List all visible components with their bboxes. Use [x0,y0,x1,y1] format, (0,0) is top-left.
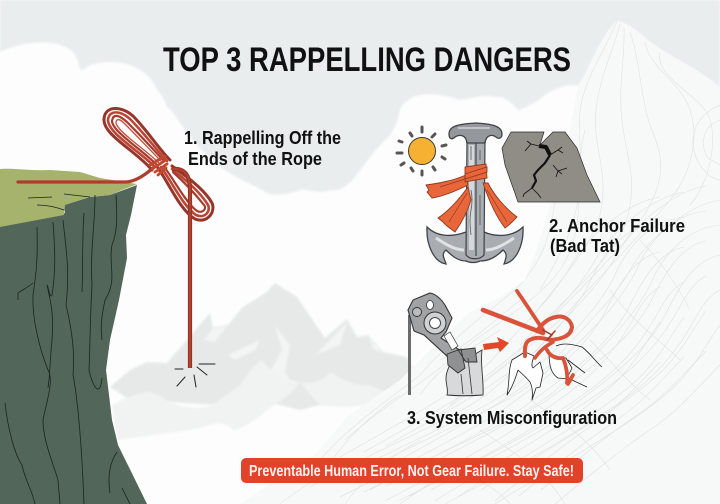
panel: cliff [0,169,147,504]
label 1: 1. Rappelling Off the [184,128,341,148]
label 2: (Bad Tat) [550,236,620,256]
icon: belay device [408,293,483,396]
upper coil loop [104,108,170,170]
scarf tails [426,175,517,232]
mountain snow highlights [204,322,383,390]
rock crack [523,141,567,198]
fog bank [112,360,390,440]
knot rope [483,291,573,384]
distant mountains [110,283,415,410]
anchor top bar [449,123,502,143]
hanging rope end [172,169,190,368]
banner: Preventable Human Error, Not Gear Failure. Stay Safe! [249,463,574,480]
icon: sun [397,127,446,175]
panel: rope coil [18,108,215,387]
title: TOP 3 RAPPELLING DANGERS [163,41,571,79]
device rope [408,315,411,395]
lower coil loop [158,166,213,220]
label 2 [549,216,685,256]
anchor flukes [427,227,523,264]
glove and hand [446,350,483,396]
impact marks [175,364,215,387]
device plate [408,293,461,362]
icon: hands tying knot [483,291,602,400]
icon: cracked rock [502,132,600,202]
rock cracks [5,194,130,504]
cliff grass top [0,169,137,227]
icon: anchor [426,123,523,264]
banner [241,458,583,483]
anchor shaft [466,140,485,259]
sky and clouds [0,0,720,195]
label 3: 3. System Misconfiguration [407,408,617,428]
arrow [483,337,509,352]
scarf knot [465,164,487,182]
label 1 [184,128,341,169]
cliff rock face [0,185,147,504]
hands [507,344,602,400]
rope on ledge [18,168,153,182]
glove cuff [447,348,477,373]
contour lines [280,21,720,504]
label 2: 2. Anchor Failure [549,216,685,236]
rope knot wrap [150,156,167,175]
contour terrain [280,22,720,504]
label 1: Ends of the Rope [188,149,322,169]
